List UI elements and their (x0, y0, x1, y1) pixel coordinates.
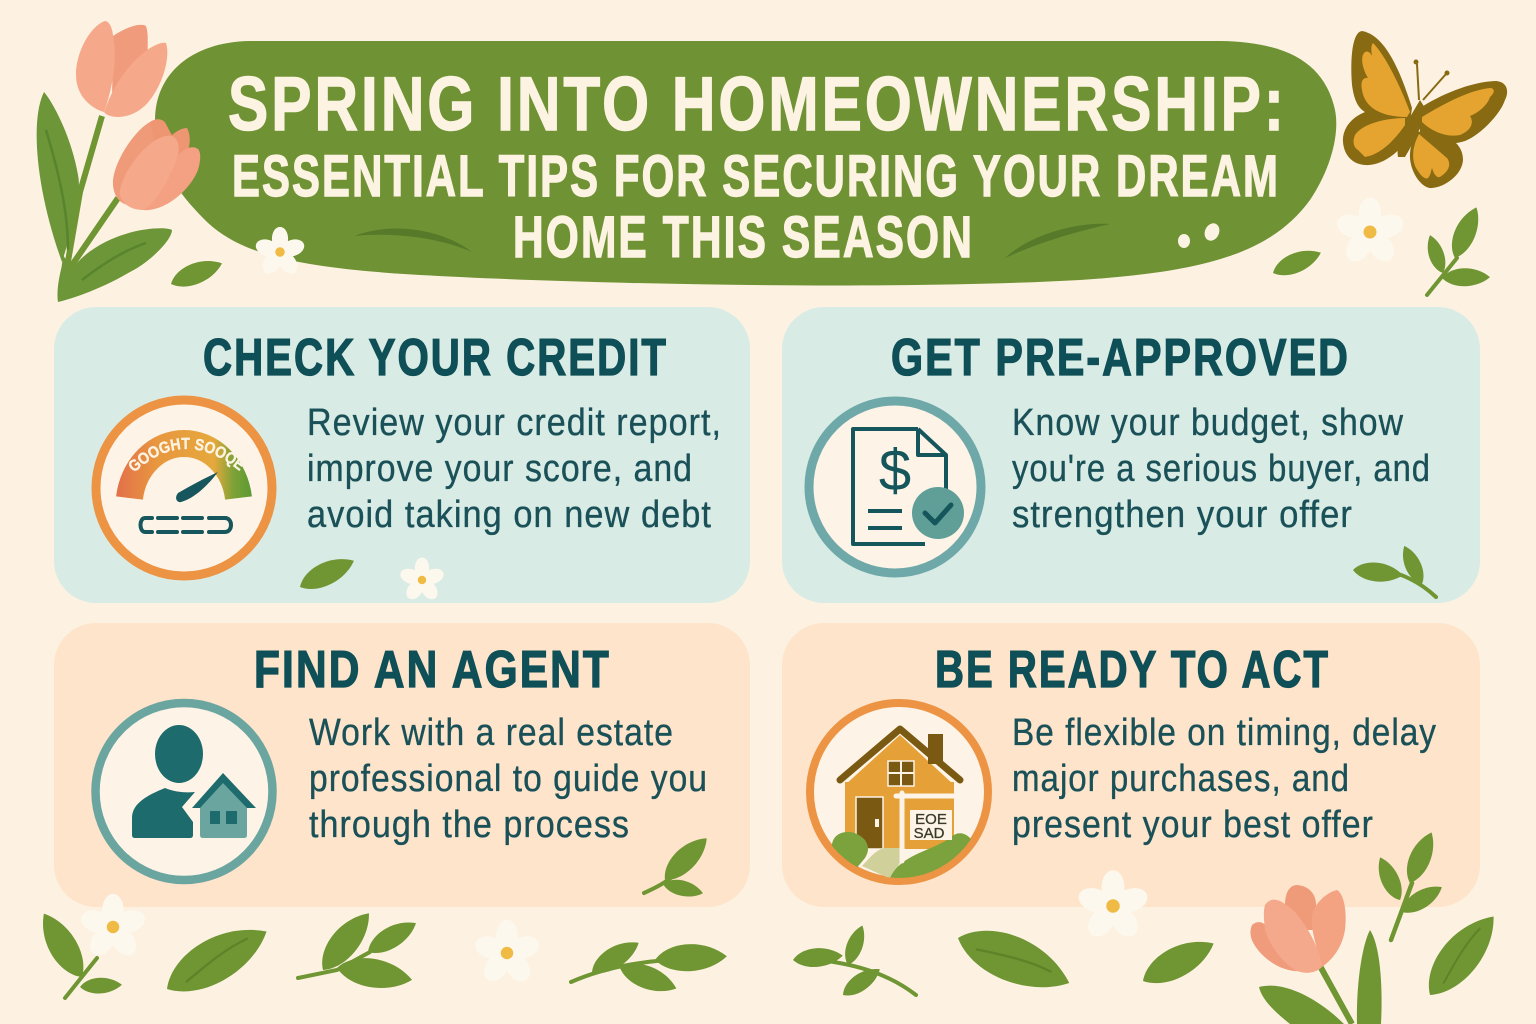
title banner (155, 41, 1336, 285)
title text: HOME THIS SEASON (513, 205, 974, 270)
sprig bottom (792, 923, 916, 1002)
text: improve your score, and (307, 448, 693, 490)
sprig bottom left (32, 907, 122, 998)
heading: GET PRE-APPROVED (891, 329, 1350, 387)
heading: FIND AN AGENT (254, 641, 611, 699)
heading: BE READY TO ACT (935, 641, 1330, 699)
flower on banner (254, 227, 306, 277)
banner dots (1178, 221, 1222, 248)
leaf bottom (156, 912, 277, 1007)
tulips top left (37, 21, 200, 302)
panel: find an agent (54, 623, 750, 907)
text: present your best offer (1012, 804, 1374, 846)
leaf top left (167, 253, 226, 293)
sprig bottom (298, 904, 421, 993)
butterfly (1343, 31, 1507, 188)
text (1012, 402, 1431, 536)
leaf bottom (1136, 930, 1220, 994)
flower bottom right (1075, 870, 1151, 942)
text: professional to guide you (309, 758, 708, 800)
flower bottom (472, 920, 542, 986)
icon: house with sign (810, 703, 988, 890)
icon: credit gauge: GOOGHT SOOQE (128, 438, 242, 471)
icon: pre-approval document (809, 401, 981, 573)
panel: check your credit (54, 307, 750, 603)
text (1012, 712, 1437, 846)
icon: pre-approval document: $ (879, 438, 911, 503)
text: through the process (309, 804, 630, 846)
sprig bottom right (1372, 828, 1446, 940)
leaf (295, 550, 359, 597)
banner grass stroke left (354, 229, 472, 252)
text: major purchases, and (1012, 758, 1350, 800)
sprig top right (1423, 203, 1490, 295)
icon: agent with house (96, 703, 272, 880)
icon: credit gauge (92, 396, 276, 580)
panel: be ready to act (782, 623, 1480, 907)
panel: get pre-approved (782, 307, 1480, 603)
text (307, 402, 722, 536)
sprig bottom (571, 934, 728, 999)
sprig (644, 830, 714, 900)
flower (398, 557, 446, 602)
sprig (1352, 543, 1436, 597)
text: you're a serious buyer, and (1012, 448, 1431, 490)
leaf bottom (950, 916, 1078, 1003)
text: Review your credit report, (307, 402, 722, 444)
title text: SPRING INTO HOMEOWNERSHIP: (228, 62, 1287, 147)
flower bottom left (78, 894, 148, 960)
text: Work with a real estate (309, 712, 674, 754)
title text (228, 62, 1287, 270)
text: avoid taking on new debt (307, 494, 712, 536)
heading: CHECK YOUR CREDIT (203, 329, 668, 387)
flower top right (1334, 198, 1406, 266)
banner grass stroke right (1005, 224, 1110, 258)
text: strengthen your offer (1012, 494, 1353, 536)
icon: house with sign: EOE (915, 811, 947, 828)
text: Be flexible on timing, delay (1012, 712, 1437, 754)
tulip bottom right (1250, 885, 1508, 1024)
leaf top right (1269, 243, 1325, 282)
text (309, 712, 708, 846)
text: Know your budget, show (1012, 402, 1404, 444)
icon: house with sign: SAD (914, 825, 945, 842)
